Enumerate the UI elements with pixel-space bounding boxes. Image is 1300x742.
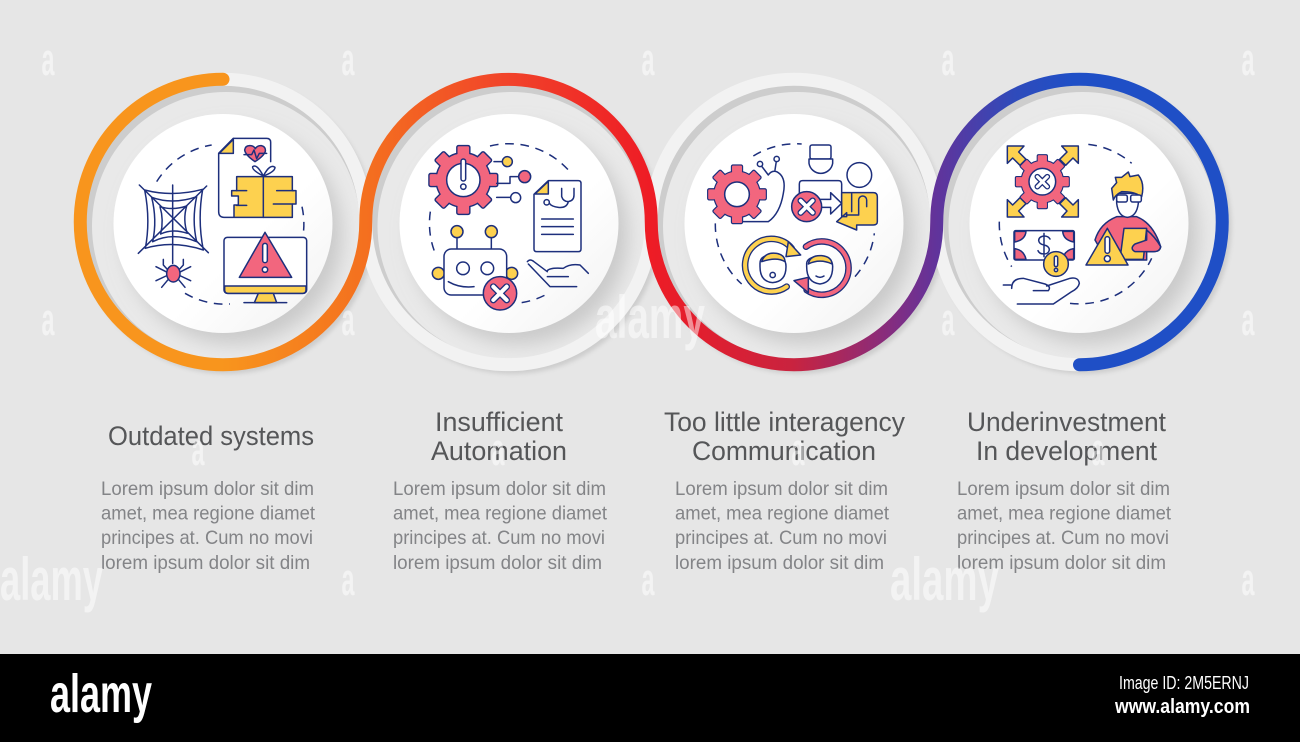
heading: underinvestment in development <box>967 407 1167 466</box>
text block 2: Lorem ipsum dolor sit dim <box>393 478 606 500</box>
icon: worker with laptop <box>1095 172 1161 260</box>
icon: exchange cycle <box>745 239 849 295</box>
heading: outdated systems: Outdated systems <box>108 421 314 451</box>
text block 4: amet, mea regione diamet <box>957 502 1172 524</box>
heading: underinvestment in development: In development <box>976 436 1158 466</box>
icon: underinvestment in development <box>999 144 1161 304</box>
watermark marks: a <box>1242 295 1255 345</box>
footer image id: Image ID: 2M5ERNJ <box>1119 673 1249 693</box>
heading: insufficient automation: Automation <box>431 436 567 466</box>
text block 3: principes at. Cum no movi <box>675 527 887 549</box>
watermark: alamy right: alamy <box>890 546 999 613</box>
icon: two faces <box>760 253 833 284</box>
text block 2: lorem ipsum dolor sit dim <box>393 552 602 574</box>
icon: circuit nodes <box>494 157 531 203</box>
text block 3 <box>675 478 890 574</box>
text block 1: lorem ipsum dolor sit dim <box>101 552 310 574</box>
heading: underinvestment in development: Underinvestment <box>967 407 1167 437</box>
watermark marks: a <box>1242 35 1255 85</box>
icon: robot <box>432 226 518 310</box>
watermark: alamy left: alamy <box>0 546 103 613</box>
heading: insufficient automation: Insufficient <box>435 407 564 437</box>
watermark marks: a <box>942 295 955 345</box>
icon: warning triangle <box>1086 228 1128 265</box>
text block 4: principes at. Cum no movi <box>957 527 1169 549</box>
heading: insufficient automation <box>431 407 567 466</box>
icon: medical document <box>219 138 271 217</box>
text block 4: Lorem ipsum dolor sit dim <box>957 478 1170 500</box>
watermark marks: a <box>342 35 355 85</box>
watermark marks: a <box>642 35 655 85</box>
watermark marks: a <box>192 425 205 475</box>
icon: banknote <box>1014 231 1074 260</box>
text block 1: amet, mea regione diamet <box>101 502 316 524</box>
heading: too little interagency communication <box>664 407 906 466</box>
dashed circle <box>999 144 1152 304</box>
footer url: www.alamy.com <box>1114 696 1250 718</box>
icon: hand <box>1003 278 1079 304</box>
icon: old gift box <box>232 166 296 217</box>
text block 1: principes at. Cum no movi <box>101 527 313 549</box>
ring inner discs <box>92 92 1216 360</box>
dashed circle <box>157 145 304 304</box>
heading: too little interagency communication: Communication <box>692 436 876 466</box>
text block 2: principes at. Cum no movi <box>393 527 605 549</box>
ring inner crescent shadows <box>86 85 1216 359</box>
icon: gear warning <box>429 146 498 214</box>
light ring segments <box>223 79 1080 365</box>
icon: too little interagency communication <box>708 144 877 295</box>
text block 4 <box>957 478 1172 574</box>
icon: second person with box <box>837 163 877 230</box>
text block 4: lorem ipsum dolor sit dim <box>957 552 1166 574</box>
icon: insufficient automation <box>429 144 588 310</box>
icon: monitor warning <box>224 232 307 303</box>
watermark marks: a <box>792 425 805 475</box>
ring outer shadows <box>79 78 1232 374</box>
icon: corner arrows <box>1007 146 1078 217</box>
icon: snail with gear <box>708 156 784 224</box>
icon: gear with cross <box>1015 155 1069 209</box>
icon: spider web <box>138 185 208 263</box>
white discs <box>114 114 1188 333</box>
text block 3: amet, mea regione diamet <box>675 502 890 524</box>
watermark marks: a <box>342 555 355 605</box>
white disc shadows <box>124 126 1198 344</box>
text block 2: amet, mea regione diamet <box>393 502 608 524</box>
icon: first person <box>799 145 842 200</box>
watermark marks: a <box>342 295 355 345</box>
text block 2 <box>393 478 608 574</box>
ring base discs <box>80 79 1222 365</box>
footer logo: alamy <box>50 664 152 724</box>
watermark marks: a <box>642 555 655 605</box>
icon: spider <box>156 259 191 287</box>
dashed circle <box>429 144 568 303</box>
icon: open hand <box>527 260 588 287</box>
watermark marks: a <box>42 295 55 345</box>
coloured gradient ribbon <box>80 79 1222 365</box>
text block 3: Lorem ipsum dolor sit dim <box>675 478 888 500</box>
icon: medical document <box>534 181 581 252</box>
text block 1 <box>101 478 316 574</box>
icon: outdated systems <box>138 138 307 304</box>
watermark marks: a <box>1242 555 1255 605</box>
icon: arrow and cross badge <box>792 192 842 222</box>
watermark marks: a <box>942 35 955 85</box>
watermark marks: a <box>42 35 55 85</box>
watermark marks <box>42 35 1255 605</box>
footer bar <box>0 654 1300 742</box>
heading: too little interagency communication: Too little interagency <box>664 407 906 437</box>
watermark marks: a <box>492 425 505 475</box>
icon: warning coin <box>1044 252 1068 276</box>
text block 3: lorem ipsum dolor sit dim <box>675 552 884 574</box>
watermark marks: a <box>1092 425 1105 475</box>
watermark: alamy centre: alamy <box>595 284 705 351</box>
text block 1: Lorem ipsum dolor sit dim <box>101 478 314 500</box>
dashed circle <box>715 144 874 284</box>
